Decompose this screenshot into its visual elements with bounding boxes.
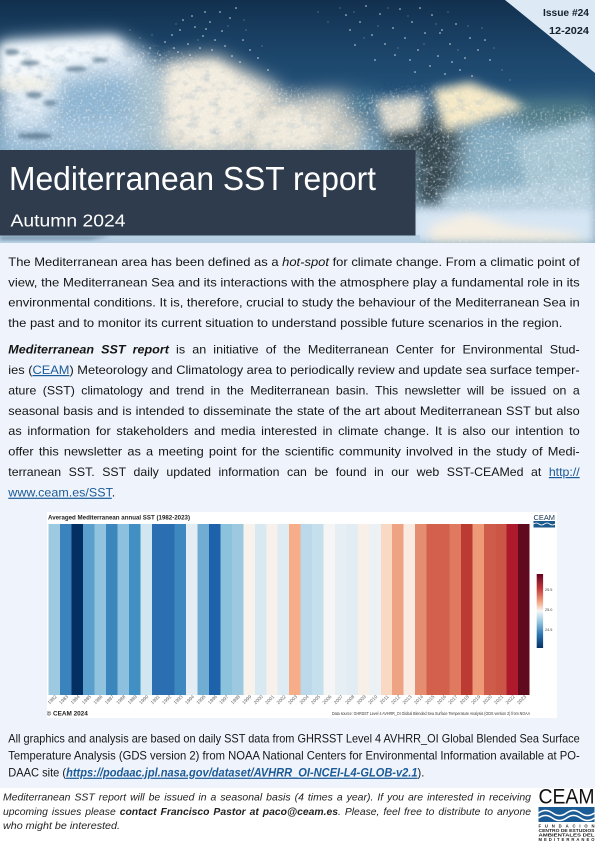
CEAM foundation logo: AMBIENTALES DEL — [538, 832, 595, 838]
year axis labels: 2011 — [379, 694, 391, 706]
year axis labels: 1996 — [207, 694, 219, 706]
year axis labels — [47, 694, 528, 706]
issue number: Issue #24 — [543, 8, 589, 19]
year axis labels: 2010 — [367, 694, 379, 706]
initiative paragraph: seasonal basis and is intended to disseminate the state of the art about Mediterranean SST but also — [8, 404, 580, 418]
intro paragraph: The Mediterranean area has been defined as a hot-spot for climate change. From a climatic point of — [8, 255, 580, 269]
intro paragraph: the past and to monitor its current situation to understand possible future scenarios in the region. — [8, 316, 562, 330]
year axis labels: 2016 — [436, 694, 448, 706]
year axis labels: 1995 — [196, 694, 208, 706]
data source note: Data source: GHRSST Level 4 AVHRR_OI Global Blended Sea Surface Temperature Analysis (GDS version 2) from NOAA — [332, 711, 530, 716]
year axis labels: 2012 — [390, 694, 402, 706]
intro paragraph: environmental conditions. It is, therefore, crucial to study the behaviour of the Mediterranean Sea in — [8, 296, 580, 310]
intro paragraph: view, the Mediterranean Sea and its interactions with the atmosphere play a fundamental role in its — [8, 276, 580, 290]
colour scale legend: 24.5 — [545, 628, 552, 632]
title panel — [0, 150, 416, 236]
year axis labels: 2013 — [402, 694, 414, 706]
initiative paragraph: www.ceam.es/SST . — [7, 486, 115, 500]
year axis labels: 1999 — [241, 694, 253, 706]
lower foam — [410, 206, 595, 243]
year axis labels: 2022 — [505, 694, 517, 706]
initiative paragraph: terranean SST. SST daily updated information can be found in our web SST-CEAMed at http:// — [8, 465, 580, 479]
header photo: breaking wave — [0, 0, 595, 243]
chart copyright: © CEAM 2024 — [47, 710, 88, 718]
spray droplets — [150, 6, 490, 76]
year axis labels: 1993 — [173, 694, 185, 706]
data source paragraph — [8, 732, 580, 780]
initiative paragraph: ies (CEAM) Meteorology and Climatology area to periodically review and update sea surface temper- — [8, 363, 580, 377]
year axis labels: 2021 — [493, 694, 505, 706]
colour scale legend — [537, 574, 552, 648]
year axis labels: 1982 — [47, 694, 59, 706]
year axis labels: 1985 — [81, 694, 93, 706]
icon: small CEAM logo: CEAM — [534, 513, 555, 522]
icon: small CEAM logo — [534, 513, 555, 528]
year axis labels: 1986 — [93, 694, 105, 706]
year axis labels: 2015 — [425, 694, 437, 706]
colour scale legend: 25.5 — [545, 588, 552, 592]
dark patches on left foam — [5, 49, 108, 139]
year axis labels: 1988 — [115, 694, 127, 706]
year axis labels: 2017 — [447, 694, 459, 706]
initiative paragraph: ature (SST) climatology and trend in the Mediterranean basin. This newsletter will be issued on a — [8, 383, 580, 397]
CEAM foundation logo: CENTRO DE ESTUDIOS — [538, 828, 595, 833]
year axis labels: 2019 — [470, 694, 482, 706]
CEAM foundation logo: MEDITERRANEO — [538, 837, 595, 842]
initiative paragraph: offer this newsletter as a meeting point for the scientific community involved in the study of Medi- — [8, 444, 580, 458]
year axis labels: 1992 — [161, 694, 173, 706]
initiative paragraph: Mediterranean SST report is an initiative of the Mediterranean Center for Environmental Stud- — [8, 343, 580, 357]
year axis labels: 2018 — [459, 694, 471, 706]
chart title: Averaged Mediterranean annual SST (1982-2023) — [48, 514, 190, 522]
subtitle: Autumn 2024 — [10, 210, 126, 230]
year axis labels: 1984 — [70, 694, 82, 706]
year axis labels: 2009 — [356, 694, 368, 706]
issue date: 12-2024 — [549, 26, 589, 37]
year axis labels: 2006 — [322, 694, 334, 706]
year axis labels: 1989 — [127, 694, 139, 706]
year axis labels: 2007 — [333, 694, 345, 706]
year axis labels: 1990 — [138, 694, 150, 706]
year axis labels: 2000 — [253, 694, 265, 706]
year axis labels: 1991 — [150, 694, 162, 706]
year axis labels: 2004 — [299, 694, 311, 706]
year axis labels: 2005 — [310, 694, 322, 706]
CEAM foundation logo — [538, 786, 595, 842]
footer note: who might be interested. — [3, 821, 120, 832]
year axis labels: 1998 — [230, 694, 242, 706]
year axis labels: 2008 — [344, 694, 356, 706]
footer note: Mediterranean SST report will be issued in a seasonal basis (4 times a year). If you are interested in receiving — [3, 792, 532, 803]
intro paragraph — [8, 255, 580, 330]
title: Mediterranean SST report — [9, 160, 376, 197]
footer note — [3, 792, 532, 832]
year axis labels: 2002 — [276, 694, 288, 706]
chart: climate stripes of annual SST — [47, 512, 557, 718]
CEAM foundation logo: FUNDACION — [538, 824, 594, 828]
initiative paragraph: as information for stakeholders and media interested in climate change. It is also our intention to — [8, 424, 580, 438]
data source paragraph: DAAC site (https://podaac.jpl.nasa.gov/dataset/AVHRR_OI-NCEI-L4-GLOB-v2.1). — [8, 766, 424, 780]
year axis labels: 2023 — [516, 694, 528, 706]
year axis labels: 2001 — [264, 694, 276, 706]
stripes — [49, 524, 529, 695]
issue corner tab — [505, 0, 595, 73]
year axis labels: 2014 — [413, 694, 425, 706]
year axis labels: 1997 — [218, 694, 230, 706]
year axis labels: 2020 — [482, 694, 494, 706]
year axis labels: 1987 — [104, 694, 116, 706]
initiative paragraph — [7, 343, 580, 500]
footer note: upcoming issues please contact Francisco Pastor at paco@ceam.es . Please, feel free to distribute to anyone — [3, 807, 532, 818]
colour scale legend: 25.0 — [545, 608, 552, 612]
year axis labels: 2003 — [287, 694, 299, 706]
year axis labels: 1983 — [58, 694, 70, 706]
year axis labels: 1994 — [184, 694, 196, 706]
